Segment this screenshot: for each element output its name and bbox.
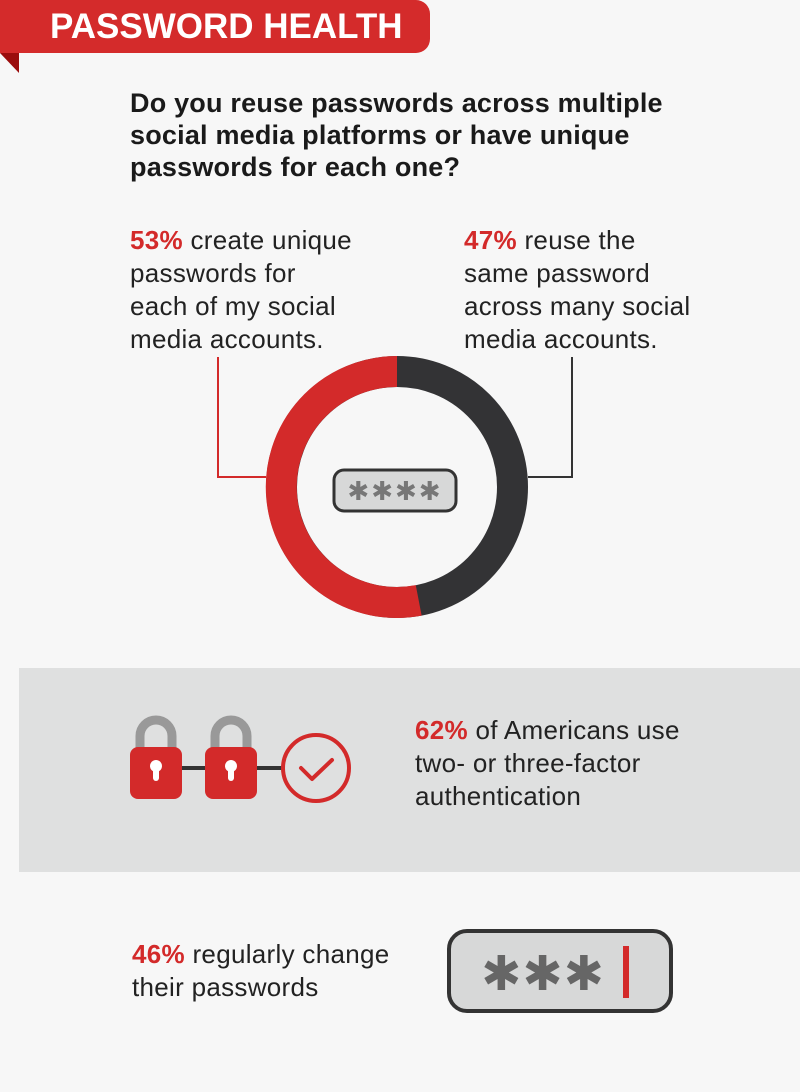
- stat: 62%: authentication: [415, 781, 581, 811]
- question heading: [130, 88, 663, 182]
- question heading: social media platforms or have unique: [130, 120, 630, 150]
- question heading: passwords for each one?: [130, 152, 460, 182]
- stat: 53% unique: passwords for: [130, 258, 296, 288]
- icon: password field with cursor: [447, 929, 673, 1013]
- title banner: PASSWORD HEALTH: [50, 7, 403, 46]
- stat: 47% reuse: same password: [464, 258, 650, 288]
- stat: 46%: [132, 939, 390, 1002]
- icon: password field: [334, 470, 456, 511]
- panel: two-factor: [19, 668, 800, 872]
- icon: password field: ✱✱✱✱: [347, 477, 443, 507]
- stat: 47% reuse: across many social: [464, 291, 690, 321]
- title banner: [0, 0, 430, 73]
- icon: locks and check: [130, 716, 351, 803]
- stat: 62%: [415, 715, 680, 811]
- donut segments: [281, 371, 512, 602]
- stat: 53% unique: each of my social: [130, 291, 336, 321]
- donut chart: [217, 356, 573, 618]
- stat: 62%: two- or three-factor: [415, 748, 641, 778]
- leader lines: [218, 357, 572, 477]
- stat: 47% reuse: 47% reuse the: [464, 225, 636, 255]
- stat: 46%: 46% regularly change: [132, 939, 390, 969]
- stat: 53% unique: media accounts.: [130, 324, 324, 354]
- stat: 53% unique: [130, 225, 352, 354]
- stat: 46%: their passwords: [132, 972, 319, 1002]
- icon: password field with cursor: ✱✱✱: [481, 946, 605, 1002]
- stat: 47% reuse: [464, 225, 690, 354]
- question heading: Do you reuse passwords across multiple: [130, 88, 663, 118]
- stat: 62%: 62% of Americans use: [415, 715, 680, 745]
- stat: 53% unique: 53% create unique: [130, 225, 352, 255]
- stat: 47% reuse: media accounts.: [464, 324, 658, 354]
